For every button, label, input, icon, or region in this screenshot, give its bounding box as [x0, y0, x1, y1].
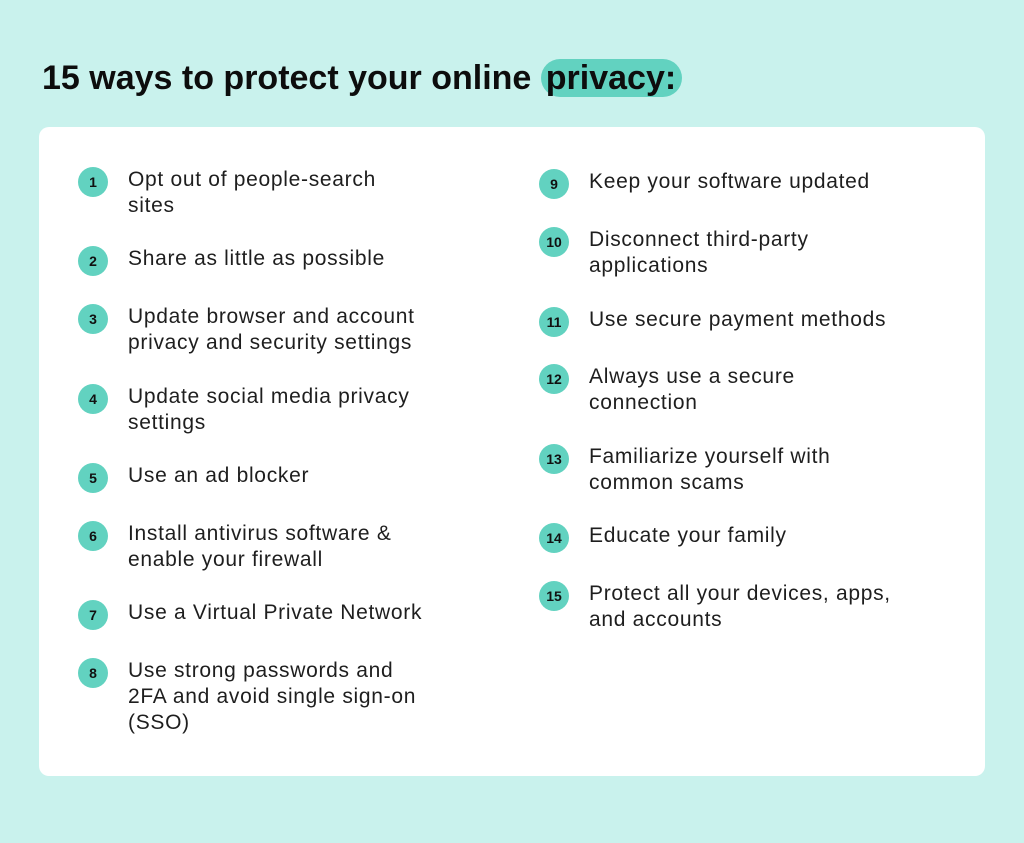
panel: list card: Use secure payment methods — [589, 308, 886, 331]
item 1 — [78, 167, 376, 217]
panel: list card: sites — [128, 194, 175, 217]
item 12 — [539, 364, 795, 414]
item 10 — [539, 227, 809, 277]
item 9 — [539, 169, 870, 199]
item 4 — [78, 384, 410, 434]
panel: list card: 7 — [89, 607, 97, 623]
panel: list card: 5 — [89, 470, 97, 486]
item 14 — [539, 523, 787, 553]
item 8 — [78, 658, 416, 734]
panel: list card: 12 — [546, 371, 562, 387]
panel: list card: Always use a secure — [589, 365, 795, 388]
panel: list card: Opt out of people-search — [128, 168, 376, 191]
item 2 — [78, 246, 385, 276]
item 11 — [539, 307, 886, 337]
panel: list card: Use an ad blocker — [128, 464, 309, 487]
panel: list card: 2 — [89, 253, 97, 269]
panel: list card: common scams — [589, 471, 744, 494]
panel: list card: 14 — [546, 530, 562, 546]
panel: list card: 15 — [546, 588, 562, 604]
panel: list card: applications — [589, 254, 708, 277]
panel: list card: 1 — [89, 174, 97, 190]
panel: list card: Disconnect third-party — [589, 228, 809, 251]
item 13 — [539, 444, 831, 494]
panel: list card: enable your firewall — [128, 548, 323, 571]
panel: list card: 4 — [89, 391, 97, 407]
panel: list card: Use a Virtual Private Network — [128, 601, 422, 624]
panel: list card: 3 — [89, 311, 97, 327]
panel: list card: (SSO) — [128, 711, 190, 734]
panel: list card: 2FA and avoid single sign-on — [128, 685, 416, 708]
item 15 — [539, 581, 891, 631]
panel: list card: Keep your software updated — [589, 170, 870, 193]
panel: list card: Educate your family — [589, 524, 787, 547]
panel: list card: 10 — [546, 234, 562, 250]
panel: list card: 8 — [89, 665, 97, 681]
item 3 — [78, 304, 415, 354]
panel: list card: Share as little as possible — [128, 247, 385, 270]
panel: list card: 13 — [546, 451, 562, 467]
title: 15 ways to protect your online privacy: — [42, 59, 676, 97]
panel: list card: Use strong passwords and — [128, 659, 393, 682]
panel: list card: Update social media privacy — [128, 385, 410, 408]
item 5 — [78, 463, 309, 493]
item 6 — [78, 521, 392, 571]
panel: list card: settings — [128, 411, 206, 434]
panel: list card: connection — [589, 391, 698, 414]
panel: list card: Install antivirus software & — [128, 522, 392, 545]
panel: list card: and accounts — [589, 608, 722, 631]
panel: list card: 9 — [550, 176, 558, 192]
item 7 — [78, 600, 422, 630]
panel: list card: 11 — [547, 314, 561, 330]
panel: list card: 6 — [89, 528, 97, 544]
panel: list card: Familiarize yourself with — [589, 445, 831, 468]
panel: list card: Update browser and account — [128, 305, 415, 328]
panel: list card: privacy and security settings — [128, 331, 412, 354]
panel: list card — [39, 127, 985, 776]
panel: list card: Protect all your devices, apps, — [589, 582, 891, 605]
